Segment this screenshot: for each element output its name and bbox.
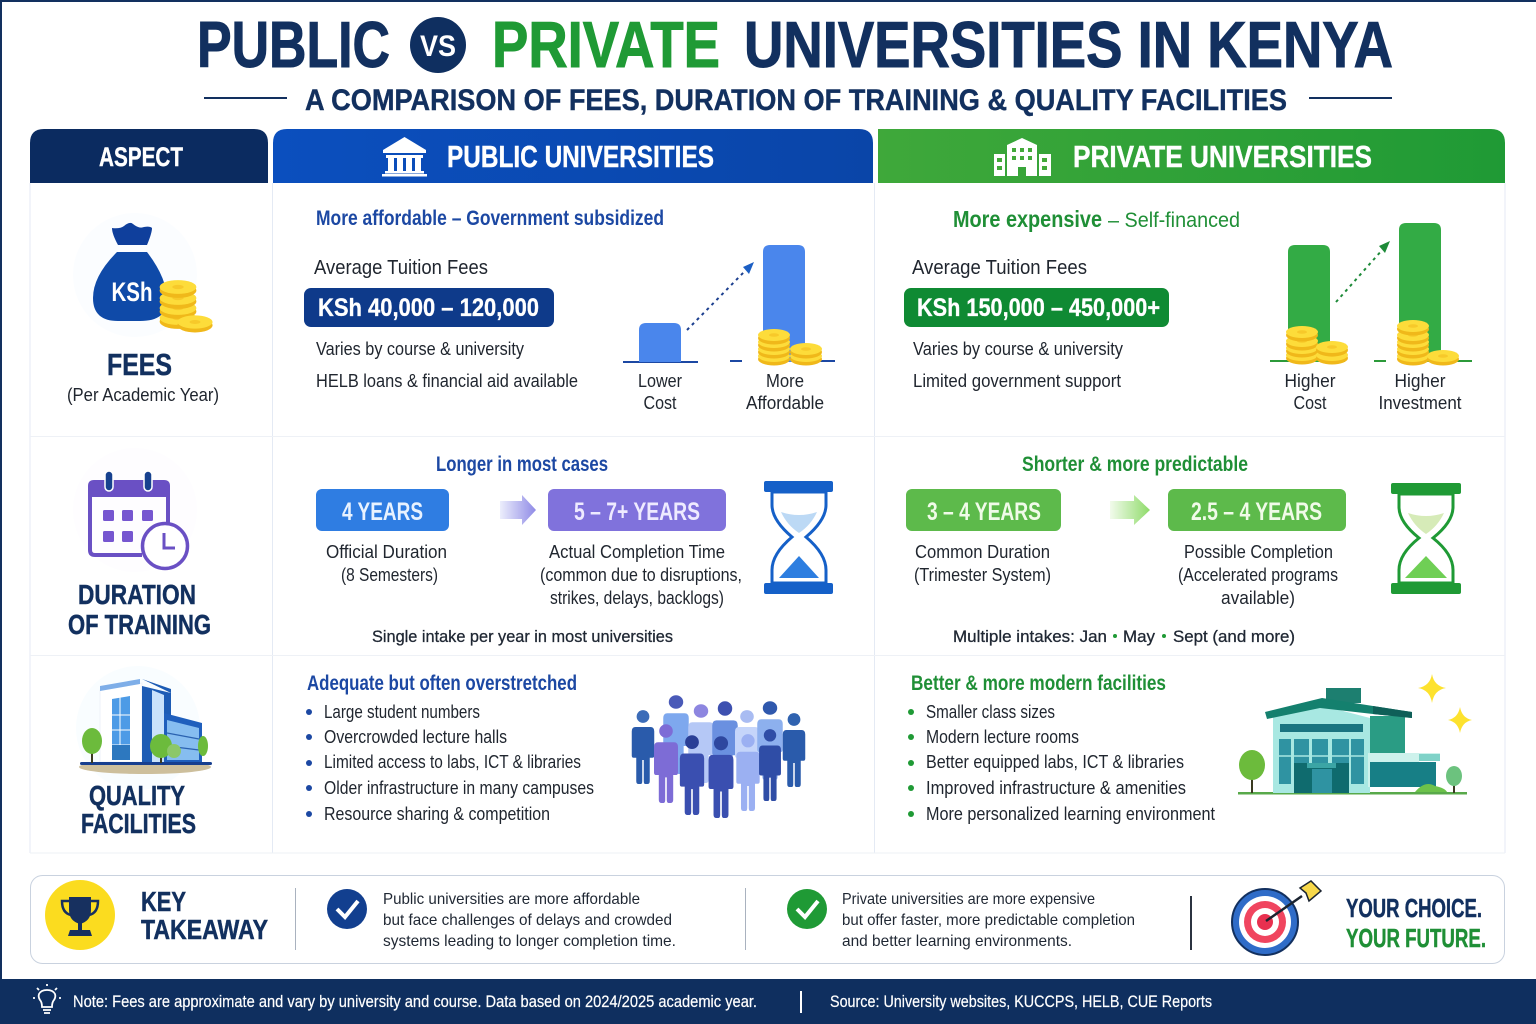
bullet list: Improved infrastructure & amenities	[926, 778, 1186, 798]
bar chart: private cost: Cost	[1294, 393, 1326, 413]
text: official duration: Official Duration	[326, 542, 447, 562]
heading: Adequate but often overstretched	[307, 672, 577, 695]
fee pill: KSh 40,000 – 120,000	[318, 294, 539, 322]
header: aspect	[30, 129, 268, 183]
text: public takeaway: but face challenges of delays and crowded	[383, 912, 672, 929]
panel: public fees	[304, 207, 835, 413]
text: common duration	[914, 542, 1051, 585]
icon: light bulb	[33, 984, 61, 1013]
heading: duration of training	[68, 579, 211, 640]
icon: modern building	[1238, 674, 1472, 794]
bullet list: Older infrastructure in many campuses	[324, 778, 594, 798]
title: UNIVERSITIES IN KENYA	[744, 8, 1393, 81]
icon: campus building	[994, 138, 1051, 176]
text: intakes: Multiple intakes: Jan	[953, 627, 1107, 646]
icon: hourglass	[1391, 483, 1461, 594]
text: source: Source: University websites, KUCCPS, HELB, CUE Reports	[830, 993, 1212, 1011]
heading: quality facilities	[81, 780, 196, 839]
bullet list	[306, 702, 594, 824]
table grid lines	[30, 183, 1505, 853]
text: actual completion	[540, 542, 742, 608]
heading: quality facilities: QUALITY	[89, 780, 185, 811]
bar chart: private cost: Higher	[1284, 371, 1336, 391]
icon: crowd of students	[632, 695, 805, 818]
heading	[953, 206, 1240, 232]
bar chart: public cost: Lower	[638, 371, 682, 391]
heading: key takeaway: TAKEAWAY	[141, 914, 268, 945]
bar chart: public cost: Cost	[644, 393, 676, 413]
text: possible completion: available)	[1221, 588, 1295, 608]
notes	[913, 339, 1123, 391]
arrow	[1110, 495, 1150, 525]
text: private takeaway: but offer faster, more predictable completion	[842, 912, 1135, 929]
pill: possible: 2.5 – 4 YEARS	[1191, 498, 1322, 526]
pill: official	[316, 489, 449, 531]
bullet list: Better equipped labs, ICT & libraries	[926, 752, 1184, 772]
text: per academic year: (Per Academic Year)	[67, 385, 219, 405]
bullet list: More personalized learning environment	[926, 804, 1215, 824]
icon: calendar and clock	[73, 448, 197, 572]
text: average tuition fees: Average Tuition Fees	[912, 257, 1087, 279]
text: public takeaway	[383, 891, 676, 950]
text: intakes	[953, 627, 1295, 646]
fee pill: KSh 150,000 – 450,000+	[917, 294, 1160, 322]
icon: public check	[327, 889, 367, 929]
text: your choice your future: YOUR CHOICE.	[1346, 893, 1482, 923]
icon: private check	[787, 889, 827, 929]
heading: key takeaway: KEY	[141, 886, 186, 917]
text: official duration: (8 Semesters)	[341, 565, 438, 585]
bullet list: Large student numbers	[324, 702, 480, 722]
panel: public facilities	[306, 672, 805, 824]
fee pill	[904, 288, 1169, 327]
notes: Varies by course & university	[316, 339, 524, 359]
icon: hourglass	[764, 481, 833, 594]
text: official duration	[326, 542, 447, 585]
pill: actual: 5 – 7+ YEARS	[574, 498, 700, 526]
subtitle: A COMPARISON OF FEES, DURATION OF TRAINING & QUALITY FACILITIES	[305, 84, 1287, 117]
bullet list: Resource sharing & competition	[324, 804, 550, 824]
heading: Shorter & more predictable	[1022, 453, 1248, 476]
text: actual completion: strikes, delays, backlogs)	[550, 588, 724, 608]
heading: duration of training: OF TRAINING	[68, 609, 211, 640]
text: actual completion: Actual Completion Time	[549, 542, 725, 562]
header: public universities: PUBLIC UNIVERSITIES	[447, 139, 714, 174]
bar chart: public cost: More	[766, 371, 804, 391]
icon: campus building	[76, 666, 212, 790]
notes: HELB loans & financial aid available	[316, 371, 578, 391]
text: common duration: (Trimester System)	[914, 565, 1051, 585]
notes	[316, 339, 578, 391]
text: public takeaway: Public universities are more affordable	[383, 891, 640, 908]
icon: target with arrow	[1232, 881, 1321, 955]
icon: trophy	[45, 880, 115, 950]
bar chart: public cost: Affordable	[746, 393, 824, 413]
text: common duration: Common Duration	[915, 542, 1050, 562]
panel: duration aspect	[68, 448, 211, 640]
panel: quality aspect	[76, 666, 212, 839]
notes: Varies by course & university	[913, 339, 1123, 359]
panel: private fees	[904, 206, 1472, 413]
bar chart: private cost: Higher	[1394, 371, 1446, 391]
panel: private duration	[906, 453, 1461, 646]
pill: common	[906, 489, 1061, 531]
icon: vs badge	[410, 17, 466, 73]
title	[197, 8, 1393, 81]
header: public universities	[273, 129, 873, 183]
text: intakes: May	[1123, 627, 1155, 646]
text: possible completion: (Accelerated programs	[1178, 565, 1338, 585]
heading: quality facilities: FACILITIES	[81, 808, 196, 839]
header: aspect: ASPECT	[99, 142, 183, 172]
panel: fees aspect	[67, 213, 219, 405]
text: note: Note: Fees are approximate and vary by university and course. Data based on 2024/2025 academic year.	[73, 993, 757, 1011]
text: private takeaway: and better learning environments.	[842, 933, 1072, 950]
header: private universities	[878, 129, 1505, 183]
text: private takeaway	[842, 891, 1135, 950]
bar chart: private cost	[1270, 223, 1472, 413]
text: private takeaway: Private universities are more expensive	[842, 891, 1095, 908]
bar chart: private cost: Investment	[1378, 393, 1462, 413]
icon: money bag	[73, 213, 213, 337]
bullet list	[908, 702, 1215, 824]
pill: official: 4 YEARS	[342, 498, 423, 526]
text: public takeaway: systems leading to longer completion time.	[383, 933, 676, 950]
icon: vs badge: VS	[420, 30, 456, 63]
text: possible completion: Possible Completion	[1184, 542, 1333, 562]
bullet list: Overcrowded lecture halls	[324, 727, 507, 747]
icon: institution	[382, 137, 427, 176]
heading: duration of training: DURATION	[78, 579, 196, 610]
icon: money bag: KSh	[112, 277, 152, 307]
panel: private facilities	[908, 672, 1472, 824]
bullet list: Smaller class sizes	[926, 702, 1055, 722]
text: actual completion: (common due to disruptions,	[540, 565, 742, 585]
heading: More expensive	[953, 206, 1102, 232]
arrow	[500, 495, 536, 525]
bullet list: Limited access to labs, ICT & libraries	[324, 752, 581, 772]
fee pill	[304, 288, 554, 327]
pill: possible	[1168, 489, 1346, 531]
text: intake: Single intake per year in most universities	[372, 627, 673, 646]
pill: common: 3 – 4 YEARS	[927, 498, 1041, 526]
heading: Longer in most cases	[436, 453, 608, 476]
heading: More affordable – Government subsidized	[316, 207, 664, 230]
header: private universities: PRIVATE UNIVERSITIES	[1073, 139, 1372, 174]
text: your choice your future	[1346, 893, 1486, 953]
pill: actual	[548, 489, 726, 531]
notes: Limited government support	[913, 371, 1121, 391]
text: your choice your future: YOUR FUTURE.	[1346, 923, 1486, 953]
heading: Better & more modern facilities	[911, 672, 1166, 695]
heading: key takeaway	[141, 886, 268, 945]
text: possible completion	[1178, 542, 1338, 608]
heading: fees: FEES	[107, 347, 172, 382]
panel: public duration	[316, 453, 833, 646]
footer band	[0, 979, 1536, 1024]
heading: – Self-financed	[1108, 209, 1240, 232]
text: intakes: Sept (and more)	[1173, 627, 1295, 646]
text: average tuition fees: Average Tuition Fees	[314, 257, 488, 279]
title: PRIVATE	[492, 8, 720, 81]
panel: key takeaway	[30, 876, 1504, 964]
bullet list: Modern lecture rooms	[926, 727, 1079, 747]
title: PUBLIC	[197, 8, 390, 81]
bar chart: public cost	[623, 245, 835, 413]
icon: sparkles	[1418, 674, 1472, 733]
